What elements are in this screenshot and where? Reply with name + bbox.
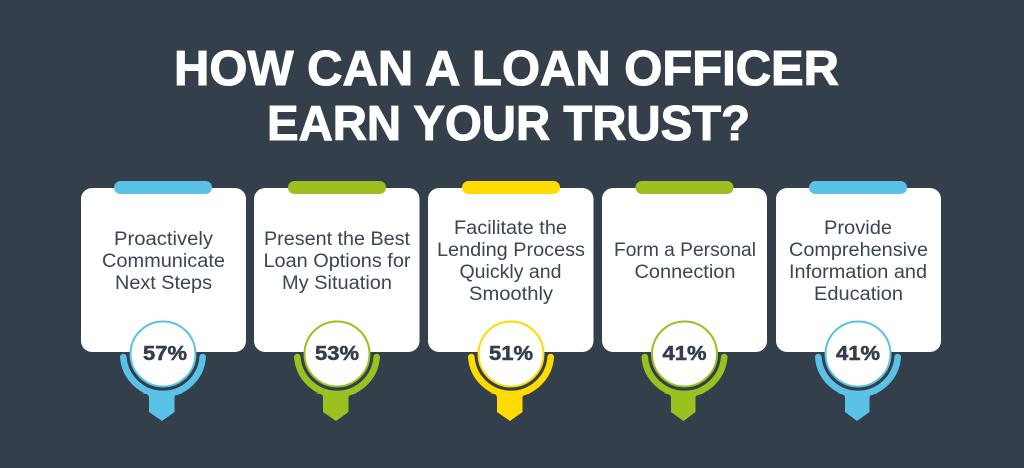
card text: form a personal connection: Form a Personal [614, 240, 756, 261]
card text: facilitate the lending process quickly and smoothly: Lending Process [437, 240, 585, 261]
card text: provide comprehensive information and education: Education [814, 284, 903, 305]
pin marker: 41% green [645, 322, 724, 421]
card text: facilitate the lending process quickly and smoothly: Smoothly [469, 284, 554, 305]
pin marker: 57%: 57% [143, 343, 187, 365]
card text: present the best loan options for my situation [264, 229, 411, 294]
pin marker: 41% blue [818, 322, 898, 421]
panel: provide comprehensive information, 41% [776, 181, 941, 421]
pin marker: 57% [123, 322, 203, 421]
card text: provide comprehensive information and education [789, 218, 928, 305]
title: EARN YOUR TRUST? [267, 97, 750, 151]
pin marker: 51%: 51% [489, 343, 533, 365]
panel: present the best loan options, 53% [254, 181, 420, 421]
card text: present the best loan options for my situation: Present the Best [264, 229, 411, 250]
title [174, 42, 839, 151]
pin marker: 41% blue: 41% [836, 343, 880, 365]
pin marker: 51% [471, 322, 551, 421]
title: HOW CAN A LOAN OFFICER [174, 42, 839, 96]
card text: facilitate the lending process quickly and smoothly [437, 218, 585, 305]
card text: proactively communicate next steps: Communicate [102, 251, 225, 272]
panel: facilitate the lending process, 51% [428, 181, 594, 421]
pin marker: 53%: 53% [315, 343, 359, 365]
card text: form a personal connection: Connection [634, 262, 736, 283]
panel: proactively communicate next steps, 57% [81, 181, 246, 421]
card text: provide comprehensive information and education: Comprehensive [789, 240, 928, 261]
card text: facilitate the lending process quickly and smoothly: Facilitate the [454, 218, 567, 239]
card text: facilitate the lending process quickly and smoothly: Quickly and [460, 262, 562, 283]
card text: provide comprehensive information and education: Information and [789, 262, 927, 283]
card text: provide comprehensive information and education: Provide [824, 218, 892, 239]
pin marker: 41% green: 41% [662, 343, 707, 365]
panel: form a personal connection, 41% [602, 181, 767, 421]
card text: proactively communicate next steps [102, 229, 225, 294]
pin marker: 53% [297, 322, 377, 421]
card text: present the best loan options for my situation: My Situation [282, 273, 392, 294]
card text: form a personal connection [614, 240, 756, 283]
card text: present the best loan options for my situation: Loan Options for [264, 251, 411, 272]
card text: proactively communicate next steps: Proactively [114, 229, 214, 250]
card text: proactively communicate next steps: Next Steps [115, 273, 212, 294]
